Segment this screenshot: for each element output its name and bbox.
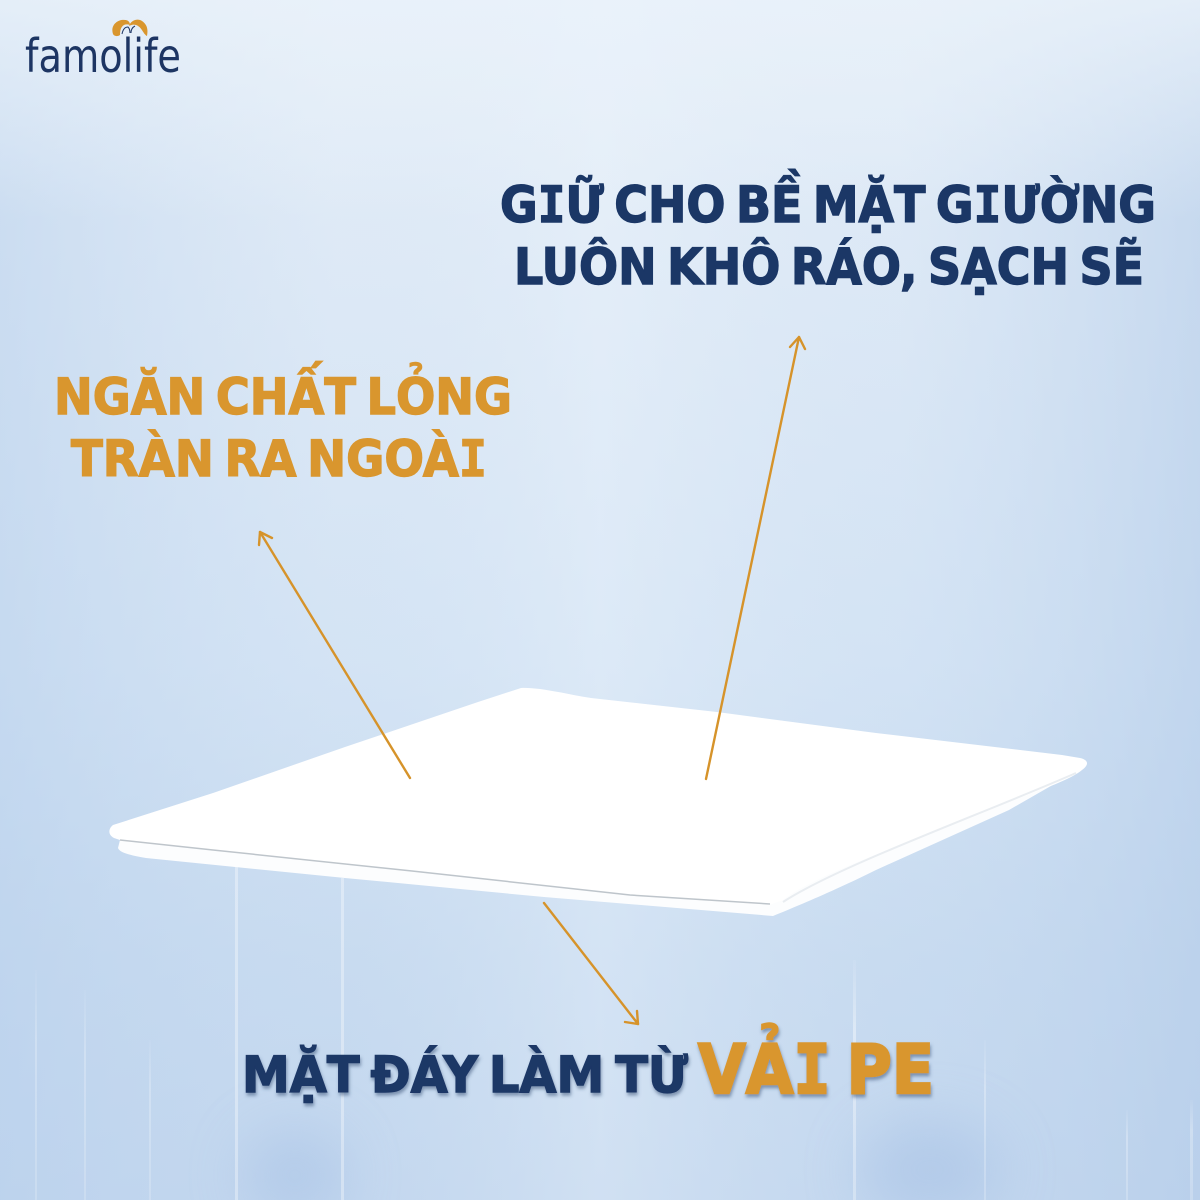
icon: cotton flower xyxy=(112,20,147,36)
heading: bottom made of PE fabric: MẶT ĐÁY LÀM TỪ xyxy=(242,1044,688,1104)
pad lower layer xyxy=(118,760,1070,916)
heading: keep bed surface dry xyxy=(500,169,1156,296)
heading: bottom made of PE fabric xyxy=(242,1023,934,1110)
heading: keep bed surface dry: LUÔN KHÔ RÁO, SẠCH SẼ xyxy=(514,237,1144,296)
pad fold line xyxy=(120,840,770,904)
heading: prevents liquid spilling: NGĂN CHẤT LỎNG xyxy=(54,361,512,426)
logo wordmark: famolife xyxy=(25,29,181,83)
heading: keep bed surface dry: GIỮ CHO BỀ MẶT GIƯỜNG xyxy=(500,169,1156,234)
heading: bottom made of PE fabric: VẢI PE xyxy=(698,1023,934,1110)
heading: prevents liquid spilling: TRÀN RA NGOÀI xyxy=(71,429,487,488)
arrow: to top heading xyxy=(706,337,805,779)
heading: prevents liquid spilling xyxy=(54,361,512,488)
arrow: to left heading xyxy=(259,532,410,778)
arrow: to bottom heading xyxy=(544,903,638,1024)
illustration: folded white pad xyxy=(109,688,1087,916)
pad upper layer xyxy=(109,688,1087,904)
logo: famolife xyxy=(25,20,181,83)
